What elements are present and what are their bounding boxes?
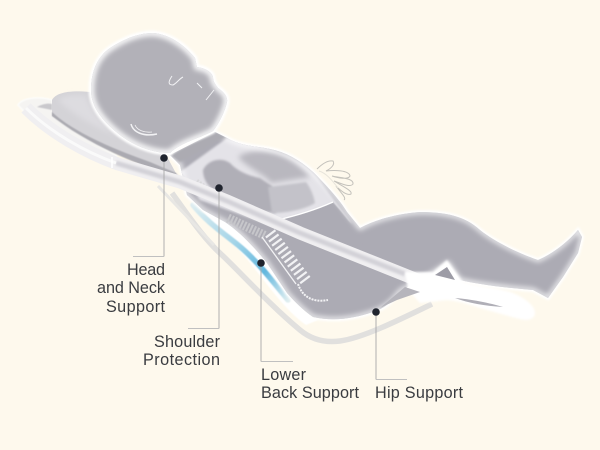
callout: head and neck support xyxy=(97,154,168,316)
white cushion under lower back xyxy=(198,198,318,325)
callout: head and neck support: Head xyxy=(127,261,165,279)
upper torso glow xyxy=(180,138,352,228)
blue lumbar support xyxy=(193,205,288,300)
seat band xyxy=(26,108,425,283)
callout: hip support xyxy=(372,308,464,402)
fingers xyxy=(317,161,353,200)
outer body glow xyxy=(170,132,582,319)
callout: lower back support: Back Support xyxy=(261,384,360,402)
seat rim outer loop xyxy=(18,98,118,168)
skeleton spine and ribs xyxy=(196,182,328,301)
upper arm xyxy=(203,160,276,213)
baby body xyxy=(170,131,582,319)
forearm xyxy=(268,182,315,213)
seat shell shadow xyxy=(158,186,432,342)
head xyxy=(91,33,227,153)
callout: shoulder protection: Shoulder xyxy=(154,333,221,351)
belly xyxy=(284,202,350,224)
callout: lower back support: Lower xyxy=(261,366,307,384)
callout: hip support: Hip Support xyxy=(375,384,464,402)
pillow xyxy=(52,91,180,178)
callout: head and neck support: Support xyxy=(106,298,166,316)
callout: head and neck support: and Neck xyxy=(97,279,166,297)
callout: shoulder protection: Protection xyxy=(143,351,220,369)
neck xyxy=(170,131,226,162)
face details xyxy=(131,76,214,135)
chest xyxy=(238,151,310,183)
callout: lower back support xyxy=(257,259,360,402)
callout: shoulder protection xyxy=(143,184,223,369)
foot end of seat xyxy=(380,260,535,320)
infographic canvas xyxy=(18,30,584,402)
